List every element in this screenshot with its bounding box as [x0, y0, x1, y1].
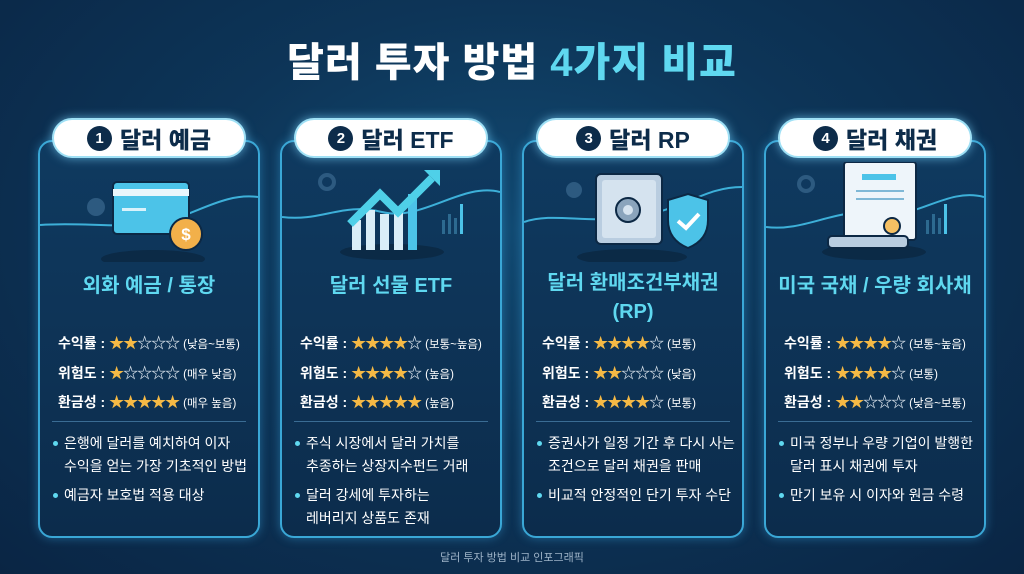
subtitle: 달러 선물 ETF — [330, 275, 452, 297]
pill heading 1: 달러 예금 — [120, 127, 211, 153]
ratings — [58, 335, 240, 411]
bullets: 레버리지 상품도 존재 — [306, 510, 430, 526]
pill heading 3: 달러 RP — [609, 127, 690, 153]
pill heading 1: 1 — [95, 130, 104, 146]
panel: dollar RP — [522, 140, 744, 538]
pill heading 3 — [536, 118, 730, 158]
ratings: 수익률 : ★★★★☆ (보통) — [542, 335, 696, 352]
panel: dollar deposit — [38, 140, 260, 538]
subtitle: (RP) — [612, 301, 654, 323]
icon: rising chart — [282, 170, 500, 260]
pill heading 1 — [52, 118, 246, 158]
subtitle: 미국 국채 / 우량 회사채 — [778, 275, 972, 297]
subtitle — [547, 272, 719, 323]
ratings: 수익률 : ★★☆☆☆ (낮음~보통) — [58, 335, 240, 352]
bullets: 만기 보유 시 이자와 원금 수령 — [790, 487, 964, 503]
icon: certificate — [766, 162, 984, 260]
bullets: 증권사가 일정 기간 후 다시 사는 — [548, 435, 735, 451]
bullets — [53, 435, 247, 503]
bullets: 조건으로 달러 채권을 판매 — [548, 458, 701, 474]
bullets: 수익을 얻는 가장 기초적인 방법 — [64, 458, 247, 474]
bullets: 은행에 달러를 예치하여 이자 — [64, 435, 230, 451]
bullets: 달러 강세에 투자하는 — [306, 487, 430, 503]
bullets: 미국 정부나 우량 기업이 발행한 — [790, 435, 973, 451]
pill heading 4: 4 — [821, 130, 830, 146]
icon: card and coin — [40, 181, 258, 262]
bullets: 달러 표시 채권에 투자 — [790, 458, 918, 474]
subtitle: 외화 예금 / 통장 — [83, 275, 215, 297]
bullets — [537, 435, 735, 503]
ratings: 위험도 : ★★☆☆☆ (낮음) — [542, 364, 696, 382]
panel: dollar ETF — [280, 140, 502, 538]
bullets: 주식 시장에서 달러 가치를 — [306, 435, 459, 451]
ratings — [300, 335, 482, 411]
ratings: 위험도 : ★☆☆☆☆ (매우 낮음) — [58, 364, 236, 382]
pill heading 2: 2 — [337, 130, 345, 146]
title: 달러 투자 방법 4가지 비교 — [287, 41, 737, 85]
icon: safe and shield — [524, 173, 742, 262]
footer caption: 달러 투자 방법 비교 인포그래픽 — [440, 552, 584, 564]
bullets — [779, 435, 973, 503]
ratings — [542, 335, 696, 411]
icon: card and coin: $ — [181, 225, 191, 244]
pill heading 4: 달러 채권 — [846, 127, 937, 153]
bullets: 비교적 안정적인 단기 투자 수단 — [548, 487, 731, 503]
panel: dollar bonds — [764, 140, 986, 538]
ratings: 수익률 : ★★★★☆ (보통~높음) — [784, 335, 966, 352]
bullets — [295, 435, 468, 526]
pill heading 2 — [294, 118, 488, 158]
ratings: 수익률 : ★★★★☆ (보통~높음) — [300, 335, 482, 352]
ratings: 위험도 : ★★★★☆ (보통) — [784, 364, 938, 382]
ratings: 환금성 : ★★★★★ (높음) — [300, 394, 454, 411]
bullets: 예금자 보호법 적용 대상 — [64, 487, 204, 503]
pill heading 2: 달러 ETF — [361, 127, 454, 153]
subtitle: 달러 환매조건부채권 — [547, 272, 719, 294]
pill heading 4 — [778, 118, 972, 158]
ratings: 위험도 : ★★★★☆ (높음) — [300, 364, 454, 382]
ratings: 환금성 : ★★★★☆ (보통) — [542, 394, 696, 411]
ratings — [784, 335, 966, 411]
ratings: 환금성 : ★★☆☆☆ (낮음~보통) — [784, 394, 966, 411]
pill heading 3: 3 — [584, 130, 593, 146]
ratings: 환금성 : ★★★★★ (매우 높음) — [58, 394, 236, 411]
bullets: 추종하는 상장지수펀드 거래 — [306, 458, 468, 474]
